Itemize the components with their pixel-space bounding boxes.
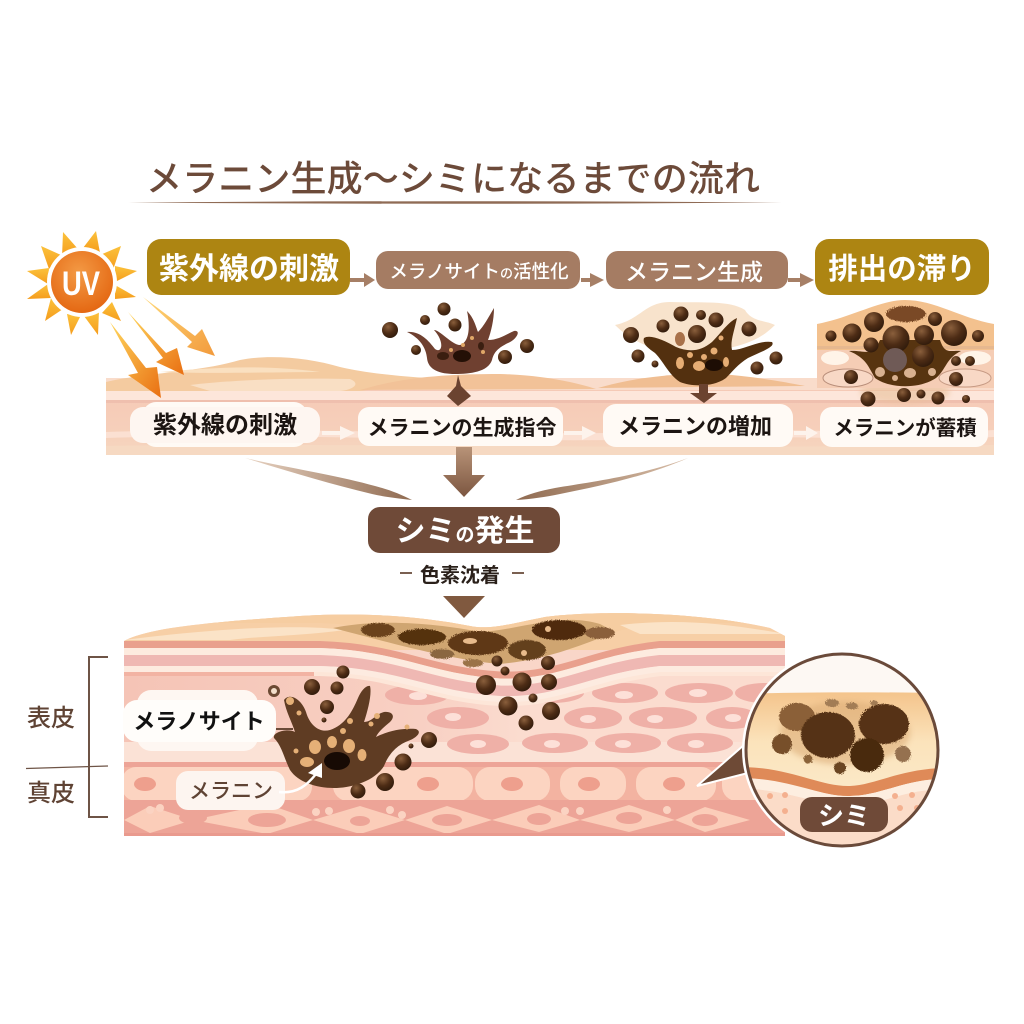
label: メラニンが蓄積 bbox=[820, 407, 988, 447]
label: メラニン: メラニン bbox=[189, 780, 273, 803]
dermis bbox=[122, 762, 785, 836]
arrow bbox=[794, 426, 818, 440]
arrow: down to skin bbox=[443, 596, 485, 618]
panel: skin strip bbox=[106, 357, 994, 455]
label: 紫外線の刺激: 紫外線の刺激 bbox=[153, 412, 297, 439]
label: 紫外線の刺激 bbox=[130, 402, 320, 447]
label: シミ: シミ bbox=[818, 801, 870, 831]
wavy skin bands bbox=[124, 613, 785, 706]
arrows: UV rays bbox=[110, 297, 215, 398]
icon: melanin production bbox=[615, 302, 782, 385]
bracket: epidermis and dermis bbox=[26, 657, 108, 817]
arrow bbox=[322, 426, 355, 440]
label: 真皮: 真皮 bbox=[27, 780, 75, 807]
label: 表皮: 表皮 bbox=[27, 705, 75, 732]
step box: 排出の滞り: 排出の滞り bbox=[828, 253, 976, 286]
title: メラニン生成〜シミになるまでの流れ bbox=[146, 158, 760, 199]
icon: UV sun bbox=[27, 231, 137, 335]
label: メラニン bbox=[176, 771, 285, 810]
step box: 排出の滞り bbox=[815, 239, 989, 295]
pigment under surface bbox=[333, 620, 615, 664]
label: メラニンの増加 bbox=[603, 404, 793, 447]
falling melanin bbox=[476, 656, 560, 730]
arrow bbox=[350, 273, 375, 287]
callout: シミの発生 bbox=[368, 507, 560, 553]
label: メラノサイト bbox=[123, 690, 293, 751]
step box: 紫外線の刺激 bbox=[147, 239, 350, 295]
callout pointer bbox=[697, 738, 752, 786]
step box: メラニン生成: メラニン生成 bbox=[625, 259, 763, 285]
callout: シミの発生: シミの発生 bbox=[395, 515, 535, 548]
spot highlights bbox=[463, 626, 551, 656]
arrow: down diamond bbox=[447, 375, 471, 406]
arrow bbox=[788, 273, 814, 287]
label: メラニンが蓄積: メラニンが蓄積 bbox=[833, 416, 977, 440]
step box: メラノサイトの活性化: メラノサイトの活性化 bbox=[389, 261, 569, 282]
label: メラニンの増加: メラニンの増加 bbox=[618, 414, 772, 439]
icon: UV sun: UV bbox=[62, 265, 100, 303]
surface spots bbox=[361, 620, 615, 667]
label: シミ bbox=[800, 797, 888, 832]
panel: melanin accumulation bbox=[817, 300, 994, 406]
epidermis cells bbox=[124, 672, 795, 762]
step box: メラノサイトの活性化 bbox=[376, 251, 580, 289]
magnifier: シミ close-up bbox=[740, 650, 944, 850]
arrow: left converging curve bbox=[245, 458, 412, 500]
arrow: center down bbox=[443, 447, 485, 497]
arrow: right converging curve bbox=[516, 458, 688, 500]
panel: skin cross-section bbox=[124, 613, 785, 836]
caption: 色素沈着 bbox=[400, 564, 524, 587]
arrow bbox=[564, 426, 596, 440]
arrow bbox=[581, 273, 604, 287]
icon: melanocyte bbox=[268, 666, 437, 798]
arrow: メラニン pointer bbox=[279, 763, 322, 792]
arrow: down bbox=[690, 384, 717, 403]
step box: 紫外線の刺激: 紫外線の刺激 bbox=[159, 253, 339, 286]
label: メラノサイト: メラノサイト bbox=[133, 709, 265, 734]
icon: melanocyte activation bbox=[382, 302, 534, 374]
label: メラニンの生成指令: メラニンの生成指令 bbox=[368, 416, 556, 440]
caption: 色素沈着: 色素沈着 bbox=[420, 564, 500, 587]
label: メラニンの生成指令 bbox=[358, 407, 563, 446]
step box: メラニン生成 bbox=[606, 251, 788, 289]
